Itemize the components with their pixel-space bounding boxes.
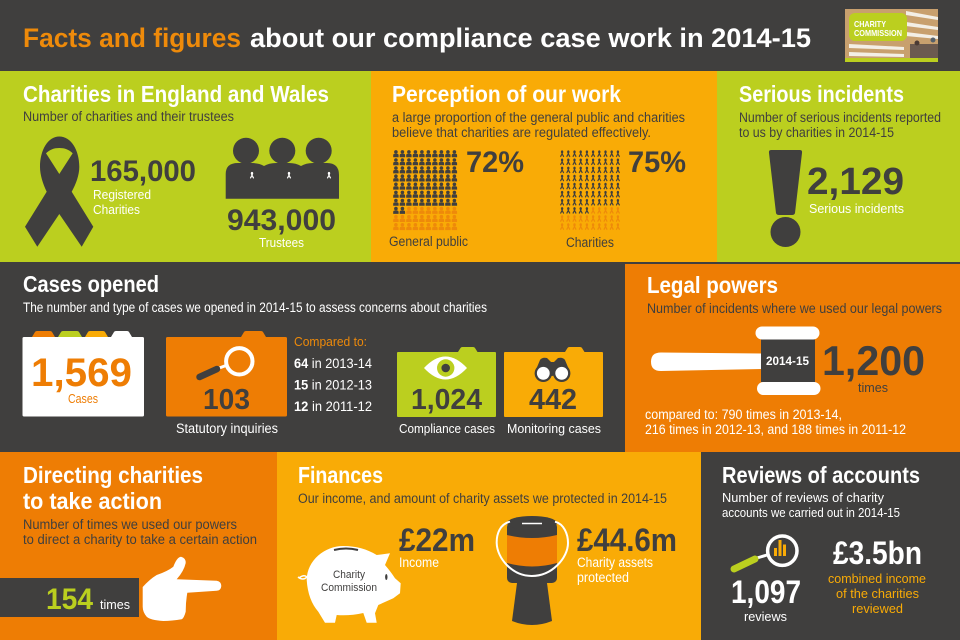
description [23,517,257,547]
label: charities: Charities [566,235,614,250]
panel: serious incidents [717,71,960,262]
folder: statutory inquiries [166,331,287,436]
stat: assets protected: Charity assets [577,555,653,570]
panel: reviews of accounts [701,452,960,640]
comparison list: 15 in 2012-13 [294,376,372,392]
stat: serious incidents: 2,129 [807,161,904,203]
subheading: The number and type of cases we opened in 2014-15 to assess concerns about charities [23,300,487,315]
stat: legal powers used: times [858,380,888,395]
folder: monitoring cases [504,347,603,436]
heading: Finances [298,462,383,488]
heading: Charities in England and Wales [23,81,329,107]
subheading: Number of incidents where we used our legal powers [647,301,942,316]
title: about our compliance case work in 2014-15 [250,23,811,53]
folder: monitoring cases: 442 [529,384,577,416]
comparison list: 12 in 2011-12 [294,398,372,414]
stat: income: £22m [399,522,475,558]
comparison list [294,334,372,414]
logo: Charity Commission [845,9,938,62]
stat: combined income: reviewed [852,601,903,616]
stat: registered charities: Charities [93,202,140,217]
icon: magnifying glass with bars [734,536,797,569]
stat: combined income: combined income [828,571,926,586]
comparison text: compared to: 790 times in 2013-14, [645,407,842,422]
stat: reviews: reviews [744,609,787,624]
panel: finances [277,452,701,640]
icon: piggy bank [298,546,401,623]
description: to us by charities in 2014-15 [739,125,894,140]
panel: legal powers [625,264,960,452]
stat: legal powers used: 1,200 [822,337,925,384]
subheading: Number of charities and their trustees [23,109,234,124]
heading: to take action [23,488,162,514]
description: accounts we carried out in 2014-15 [722,505,900,520]
folder: statutory inquiries: 103 [203,384,250,416]
stat: serious incidents: Serious incidents [809,201,904,216]
stat: combined income [828,535,926,616]
subheading: Our income, and amount of charity assets we protected in 2014-15 [298,491,667,506]
panel: cases opened [0,264,625,452]
label: general public: General public [389,234,468,249]
description [739,110,941,140]
pictogram: general public 72% [393,150,457,230]
heading: Legal powers [647,272,778,298]
stat: trustees: Trustees [259,235,304,250]
stat: assets protected [577,522,677,585]
folder: statutory inquiries: Statutory inquiries [176,421,278,436]
stat: registered charities: Registered [93,187,151,202]
description: a large proportion of the general public and charities [392,110,685,125]
logo: Charity Commission: COMMISSION [854,28,902,38]
icon: trustees [226,138,339,199]
folder: total cases: Cases [68,391,98,406]
icon: gavel: 2014-15 [766,356,810,368]
stat: registered charities [90,155,196,217]
description: Number of times we used our powers [23,517,237,532]
pictogram: charities 75% [560,150,620,230]
stat: 75%: 75% [628,146,686,179]
heading [23,462,203,514]
stat: trustees: 943,000 [227,204,336,237]
icon: piggy bank: Charity [333,569,365,581]
heading: Cases opened [23,271,159,297]
icon: gavel [651,326,820,395]
stat bar: 154 times [0,578,139,617]
folder: total cases [22,331,144,416]
icon: magnifying glass [200,348,252,377]
icon: exclamation mark [769,150,802,247]
comparison text [645,407,906,437]
heading: Directing charities [23,462,203,488]
panel: perception of our work [371,71,717,262]
heading: Perception of our work [392,81,621,107]
description: believe that charities are regulated effectively. [392,125,651,140]
panel: charities in England and Wales [0,71,371,262]
icon: collection tin [497,516,568,625]
stat bar: 154 times: times [100,597,130,612]
description [392,110,685,140]
stat: reviews [731,574,801,624]
stat: income: Income [399,555,439,570]
logo: Charity Commission: CHARITY [854,19,886,29]
comparison text: 216 times in 2012-13, and 188 times in 2011-12 [645,422,906,437]
folder: monitoring cases: Monitoring cases [507,421,601,436]
description [722,490,900,520]
icon: binoculars [535,358,570,382]
icon: eye [424,356,467,380]
folder: compliance cases: Compliance cases [399,421,495,436]
icon: pointing hand [143,557,221,621]
stat: registered charities: 165,000 [90,155,196,188]
description: to direct a charity to take a certain action [23,532,257,547]
folder: total cases: 1,569 [31,351,132,395]
description: Number of serious incidents reported [739,110,941,125]
header bar [0,0,960,71]
icon: piggy bank: Commission [321,582,377,594]
stat: combined income: £3.5bn [833,535,922,571]
stat: combined income: of the charities [836,586,919,601]
stat: assets protected: £44.6m [577,522,677,558]
stat: reviews: 1,097 [731,574,801,610]
stat bar: 154 times: 154 [46,583,93,616]
heading: Serious incidents [739,81,904,107]
stat: 72%: 72% [466,146,524,179]
title: Facts and figures [23,23,241,53]
stat: assets protected: protected [577,570,629,585]
icon: ribbon [25,136,93,247]
comparison list: Compared to: [294,334,367,349]
comparison list: 64 in 2013-14 [294,355,372,371]
heading: Reviews of accounts [722,462,920,488]
description: Number of reviews of charity [722,490,884,505]
folder: compliance cases [397,347,496,436]
folder: compliance cases: 1,024 [411,384,482,416]
panel: directing charities [0,452,277,640]
